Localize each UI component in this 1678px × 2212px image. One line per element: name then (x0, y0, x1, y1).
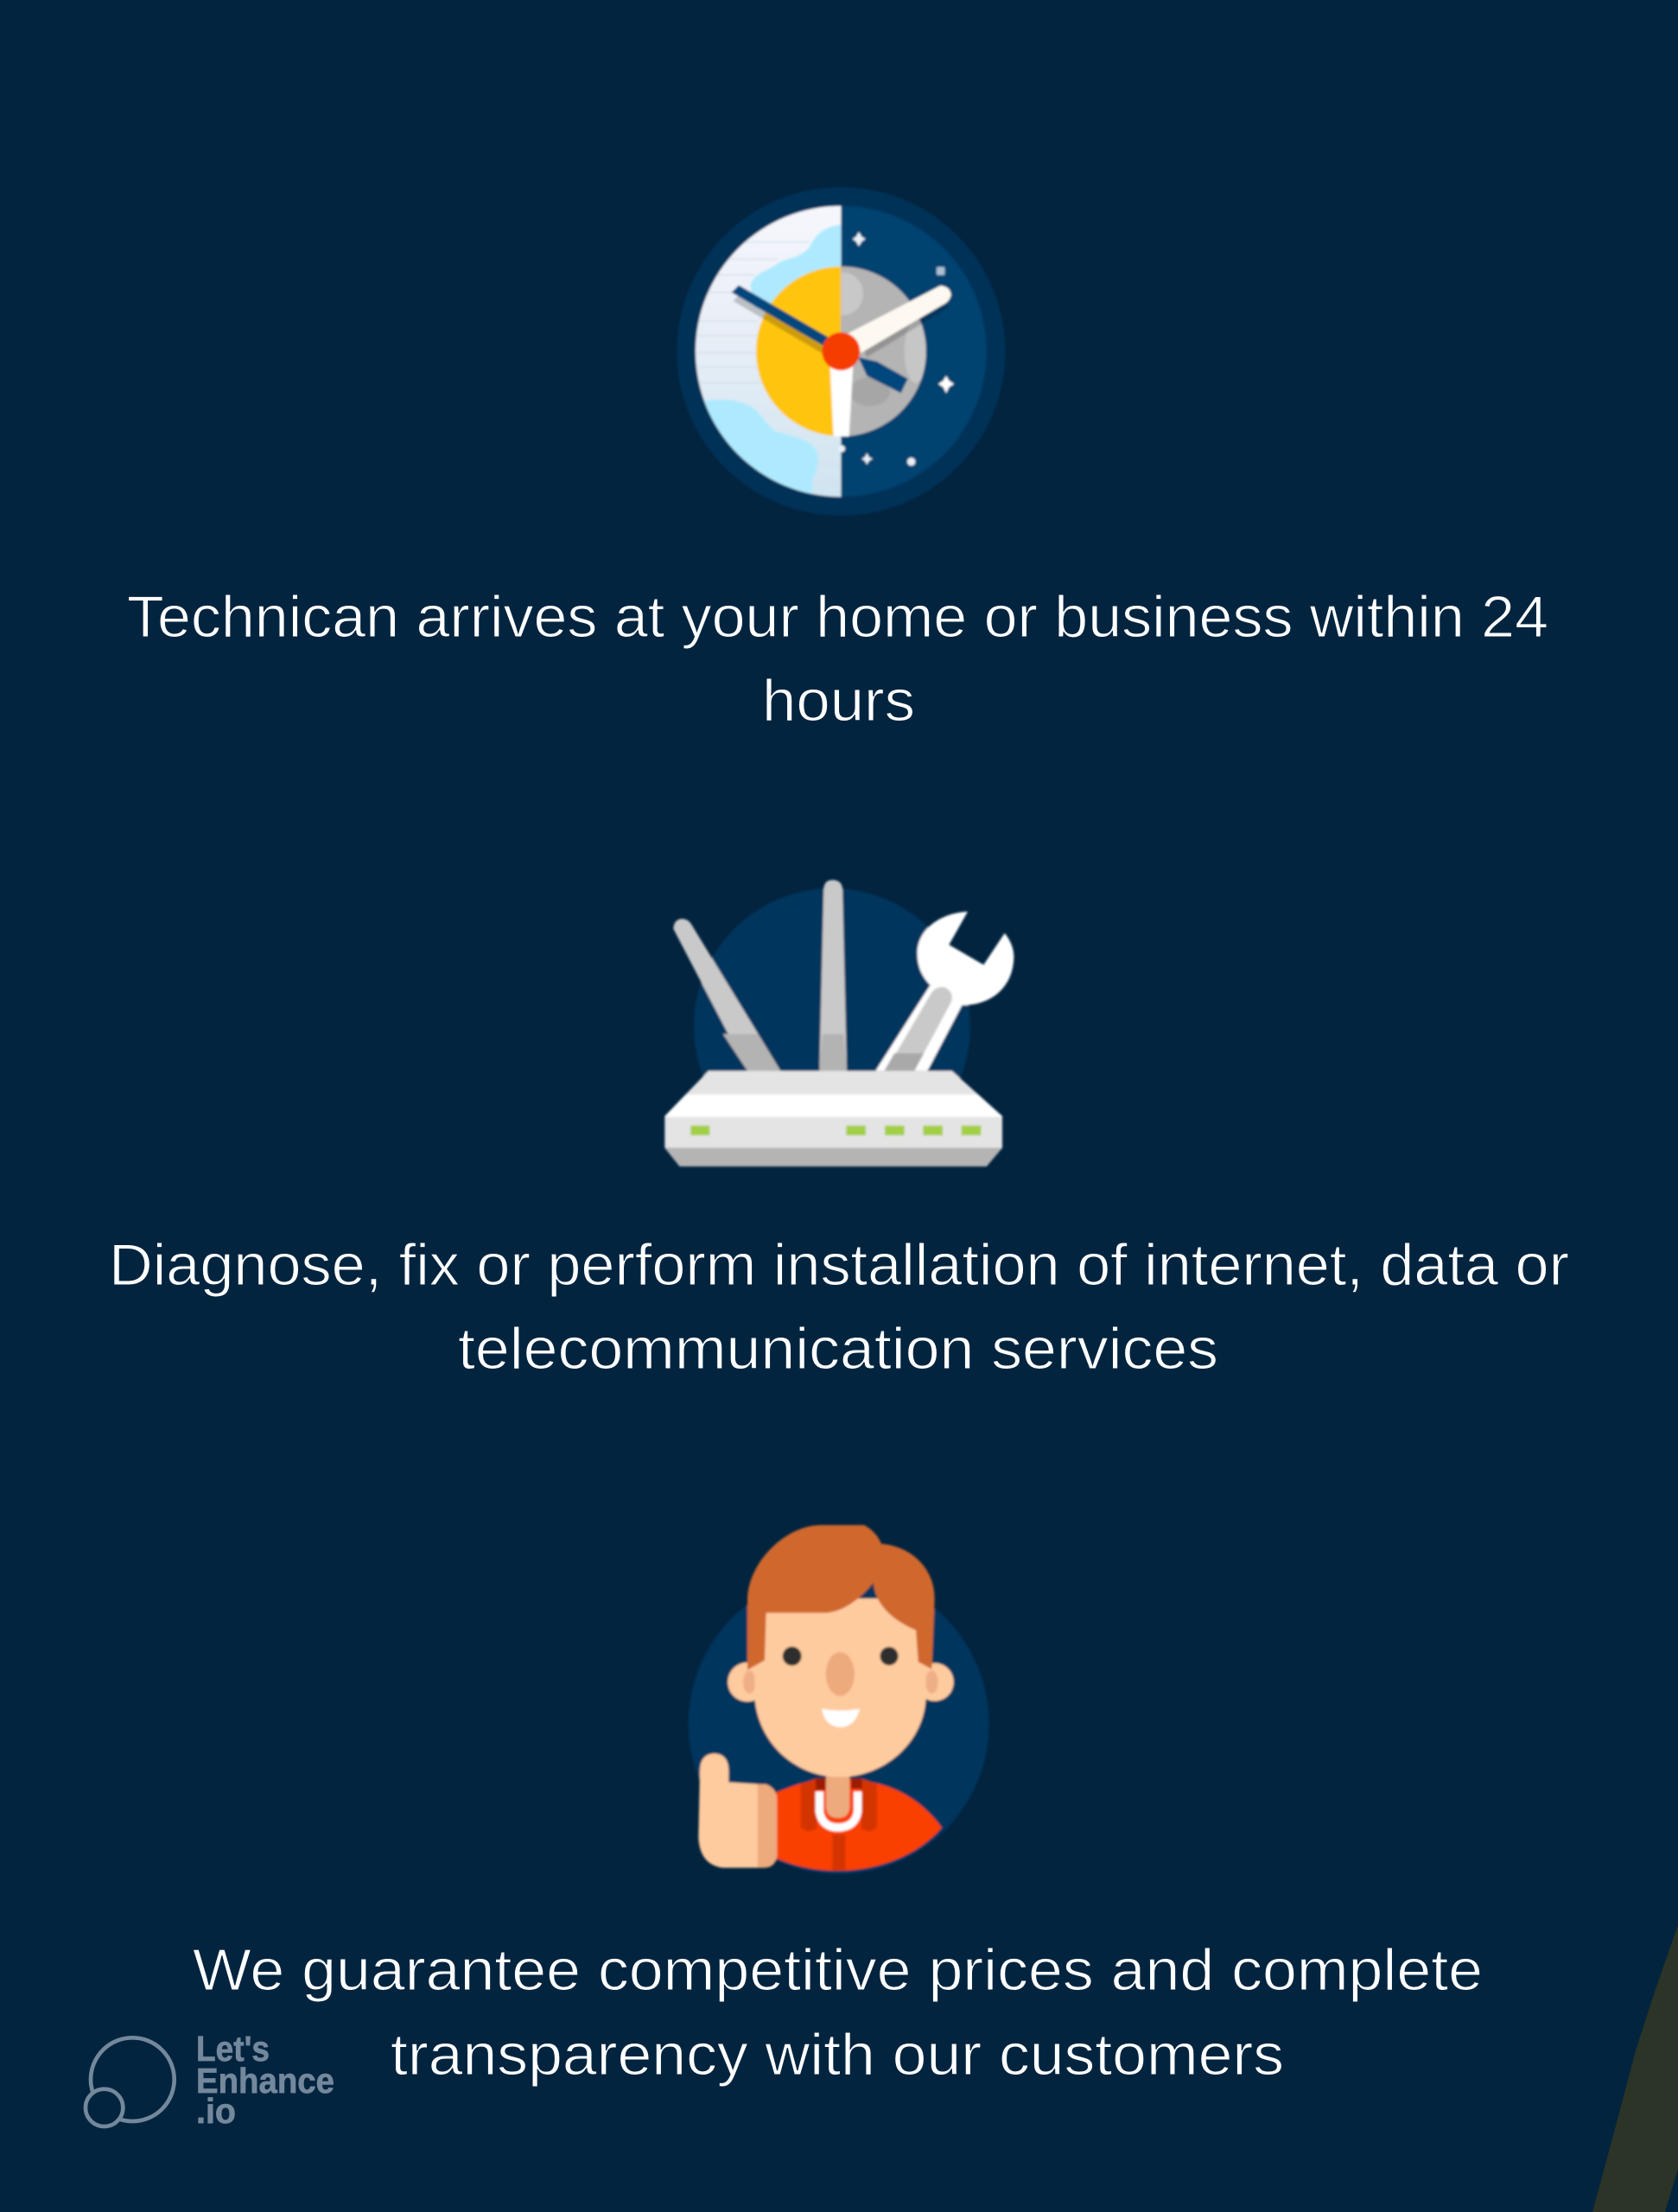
text: logo wordmark: .io (196, 2091, 236, 2131)
text: step 3 line 1: We guarantee competitive prices and complete (193, 1937, 1483, 2003)
icon: logo circles (86, 2037, 175, 2126)
panel: step 3 guarantee (193, 1525, 1483, 2088)
text: logo wordmark (196, 2029, 334, 2131)
decorative wedge: lower right corner (1592, 1925, 1678, 2212)
text: logo wordmark: Let's (196, 2029, 270, 2069)
text: step 1 line 1: Technican arrives at your home or business within 24 (127, 584, 1548, 650)
panel: step 1 arrival (127, 188, 1548, 734)
text: step 1 line 2: hours (762, 668, 915, 734)
icon: router and wrench (664, 880, 1014, 1166)
text: step 2 line 2: telecommunication services (458, 1316, 1218, 1382)
text: step 2 line 1: Diagnose, fix or perform installation of internet, data or (109, 1232, 1569, 1298)
watermark logo: Let's Enhance (86, 2029, 334, 2131)
panel: step 2 repair (109, 880, 1569, 1382)
text: logo wordmark: Enhance (196, 2061, 334, 2101)
icon: day and night clock (677, 188, 1005, 516)
icon: technician thumbs up (689, 1525, 989, 1874)
text: step 3 line 2: transparency with our customers (391, 2022, 1284, 2088)
